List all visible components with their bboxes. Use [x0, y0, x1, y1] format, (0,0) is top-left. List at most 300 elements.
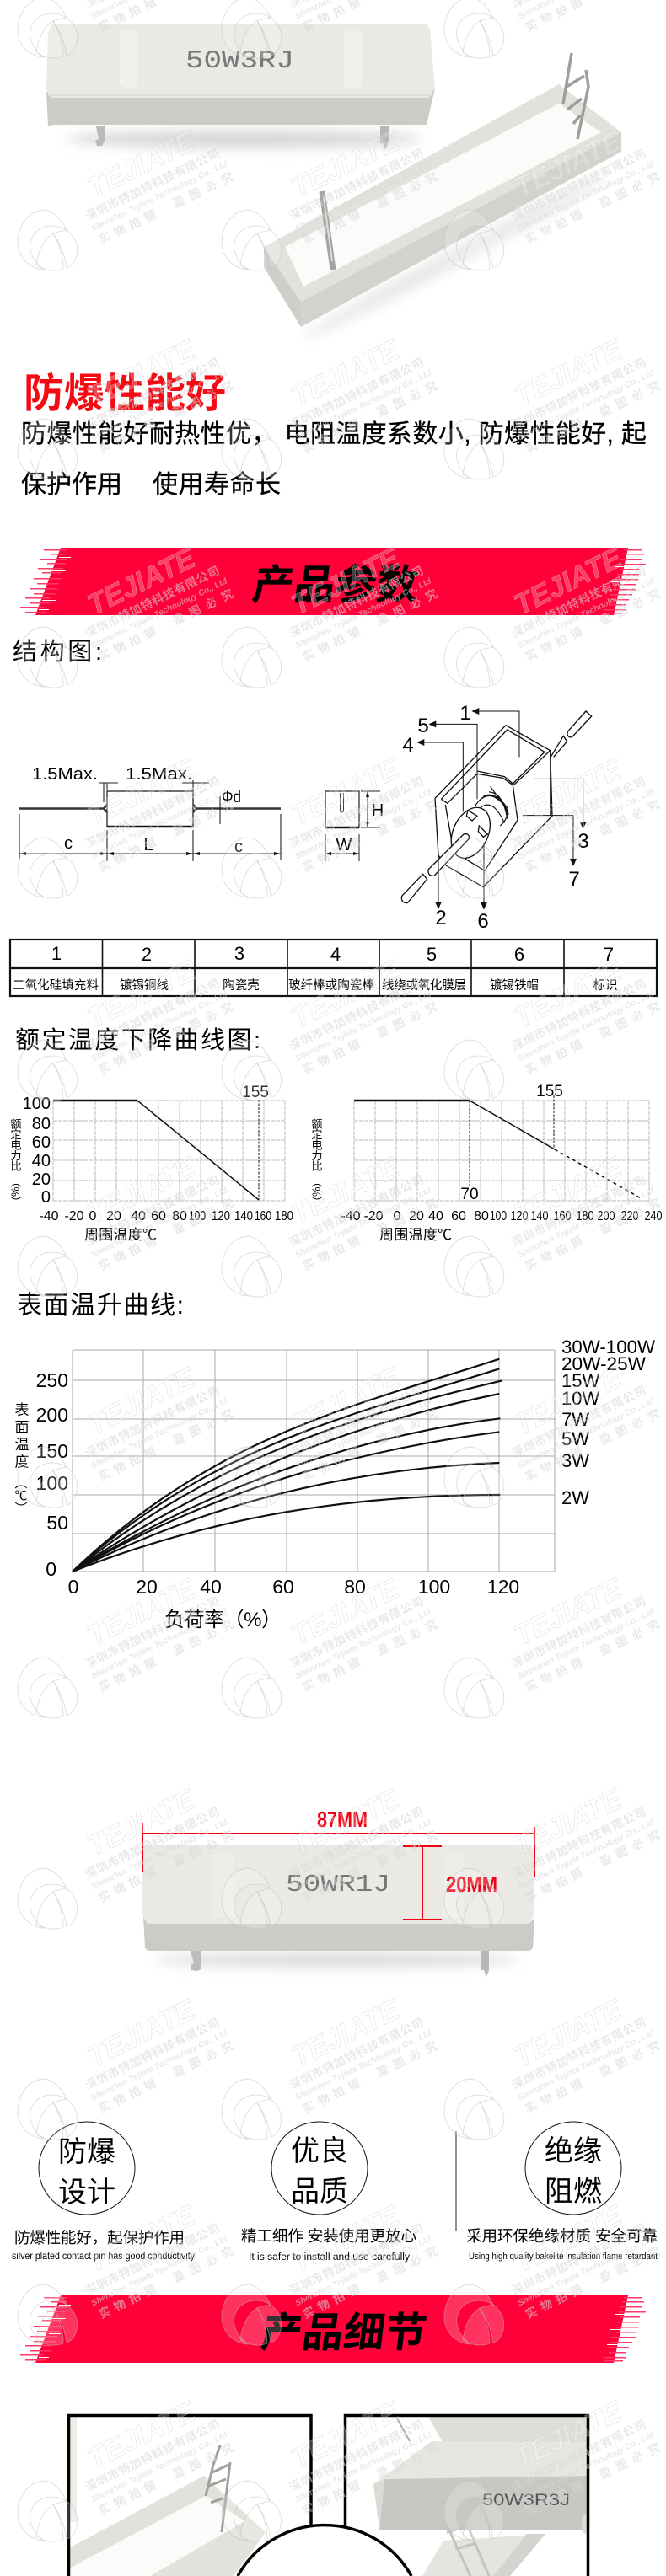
- watermarks: Shenzhen Tejiate Technology Co., Ltd: [294, 368, 433, 442]
- watermarks: 深圳市特加特科技有限公司: [83, 774, 222, 851]
- chart: surface temperature rise: 100: [418, 1576, 450, 1598]
- watermarks: 盈图必究: [170, 999, 235, 1041]
- watermarks: Shenzhen Tejiate Technology Co., Ltd: [90, 787, 229, 861]
- watermarks: Shenzhen Tejiate Technology Co., Ltd: [517, 787, 656, 861]
- watermarks: 实物拍摄: [523, 1234, 585, 1273]
- watermarks: 深圳市特加特科技有限公司: [509, 1594, 648, 1671]
- diagram: end view: H: [372, 801, 384, 820]
- chart: derating curve left: -40: [39, 1209, 59, 1224]
- dimension: 87MM length: 87MM: [317, 1807, 368, 1832]
- chart: derating curve right: （%）: [310, 1176, 322, 1207]
- divider: [206, 2132, 207, 2231]
- watermarks: 深圳市特加特科技有限公司: [509, 147, 648, 223]
- watermarks: 实物拍摄: [96, 2076, 158, 2116]
- watermarks: TEJIATE: [509, 125, 628, 204]
- watermarks: Shenzhen Tejiate Technology Co., Ltd: [90, 1186, 229, 1260]
- feature: insulation and flame retardant: [466, 2122, 658, 2262]
- watermarks: 盈图必究: [597, 1406, 662, 1448]
- watermarks: 实物拍摄: [300, 2478, 363, 2518]
- feature: explosion-proof design: 防爆性能好，起保护作用: [14, 2229, 185, 2247]
- watermarks: TEJIATE: [287, 1783, 406, 1862]
- chart: derating curve left: 140: [234, 1209, 253, 1224]
- watermarks: 盈图必究: [374, 378, 439, 420]
- watermarks: TEJIATE: [509, 2396, 628, 2475]
- watermarks: Shenzhen Tejiate Technology Co., Ltd: [294, 787, 433, 861]
- watermarks: 盈图必究: [597, 169, 662, 211]
- diagram: resistor cutaway with part callouts: 2: [435, 907, 447, 929]
- diagram: dimension drawing: c: [64, 834, 73, 853]
- watermarks: TEJIATE: [287, 2199, 406, 2279]
- watermarks: 实物拍摄: [523, 1866, 585, 1905]
- watermarks: 深圳市特加特科技有限公司: [287, 564, 426, 640]
- table: part legend: 2: [142, 944, 152, 965]
- watermarks: 盈图必究: [170, 2440, 235, 2482]
- chart: derating curve right: 100: [490, 1209, 507, 1224]
- watermarks: 实物拍摄: [96, 1866, 158, 1905]
- watermarks: 深圳市特加特科技有限公司: [509, 564, 648, 640]
- heading: derating curve: 额定温度下降曲线图:: [15, 1026, 260, 1054]
- table: part legend: 镀锡铁帽: [490, 978, 539, 993]
- chart: surface temperature rise: 250: [36, 1369, 68, 1391]
- chart: surface temperature rise: 60: [272, 1576, 294, 1598]
- watermarks: Shenzhen Tejiate Technology Co., Ltd: [90, 1396, 229, 1470]
- watermarks: 深圳市特加特科技有限公司: [509, 2418, 648, 2494]
- watermarks: TEJIATE: [83, 1994, 201, 2073]
- chart: derating curve left: （%）: [8, 1176, 22, 1207]
- chart: derating curve left: 20: [106, 1209, 121, 1224]
- watermarks: Shenzhen Tejiate Technology Co., Ltd: [90, 159, 229, 233]
- watermarks: 盈图必究: [374, 2038, 439, 2080]
- watermarks: TEJIATE: [287, 2396, 406, 2475]
- watermarks: 盈图必究: [374, 586, 439, 628]
- watermarks: 深圳市特加特科技有限公司: [83, 2418, 222, 2494]
- feature: fine quality: 品质: [291, 2176, 348, 2208]
- watermarks: 深圳市特加特科技有限公司: [83, 356, 222, 432]
- watermarks: 实物拍摄: [523, 1655, 585, 1695]
- watermarks: 深圳市特加特科技有限公司: [509, 2016, 648, 2092]
- watermarks: Shenzhen Tejiate Technology Co., Ltd: [294, 159, 433, 233]
- watermarks: 盈图必究: [374, 1196, 439, 1237]
- chart: derating curve left: 0: [41, 1188, 51, 1207]
- chart: derating curve left: -20: [64, 1209, 84, 1224]
- watermarks: Shenzhen Tejiate Technology Co., Ltd: [517, 368, 656, 442]
- watermarks: 实物拍摄: [300, 2282, 363, 2322]
- chart: derating curve left: 160: [255, 1209, 271, 1224]
- watermarks: TEJIATE: [509, 752, 628, 832]
- watermarks: Shenzhen Tejiate Technology Co., Ltd: [517, 2234, 656, 2308]
- watermarks: 盈图必究: [170, 2038, 235, 2080]
- heading: explosion-proof: 防爆性能好: [24, 372, 226, 416]
- chart: derating curve left: 155: [242, 1084, 269, 1101]
- watermarks: TEJIATE: [83, 955, 201, 1034]
- chart: derating curve left: 40: [32, 1152, 51, 1170]
- chart: derating curve right: 160: [553, 1209, 572, 1224]
- watermarks: 实物拍摄: [300, 1037, 363, 1077]
- chart: derating curve left: 100: [189, 1209, 206, 1224]
- watermarks: 盈图必究: [170, 378, 235, 420]
- watermarks: 盈图必究: [374, 2244, 439, 2285]
- table: part legend: 玻纤棒或陶瓷棒: [288, 978, 374, 993]
- chart: surface temperature rise: 200: [36, 1404, 68, 1426]
- table: part legend: 标识: [593, 978, 617, 993]
- chart: derating curve right: 40: [428, 1209, 443, 1224]
- watermarks: Shenzhen Tejiate Technology Co., Ltd: [90, 2430, 229, 2504]
- watermarks: 实物拍摄: [96, 1444, 158, 1484]
- feature: fine quality: 精工细作 安装使用更放心: [241, 2227, 416, 2245]
- watermarks: 深圳市特加特科技有限公司: [287, 1805, 426, 1882]
- watermarks: Shenzhen Tejiate Technology Co., Ltd: [90, 2028, 229, 2102]
- watermarks: 实物拍摄: [523, 1444, 585, 1484]
- watermarks: Shenzhen Tejiate Technology Co., Ltd: [294, 1396, 433, 1470]
- circular callout: [238, 2525, 411, 2576]
- watermarks: 实物拍摄: [523, 2076, 585, 2116]
- watermarks: 深圳市特加特科技有限公司: [287, 1594, 426, 1671]
- photo frame: terminal detail: [67, 2415, 311, 2576]
- watermarks: 盈图必究: [597, 2038, 662, 2080]
- feature: fine quality: [241, 2122, 416, 2263]
- banner: product details: [20, 2295, 646, 2363]
- chart: surface temperature rise: 150: [36, 1440, 68, 1462]
- watermarks: Shenzhen Tejiate Technology Co., Ltd: [517, 1186, 656, 1260]
- watermarks: 盈图必究: [170, 1828, 235, 1869]
- watermarks: 深圳市特加特科技有限公司: [509, 1805, 648, 1882]
- watermarks: Shenzhen Tejiate Technology Co., Ltd: [90, 989, 229, 1063]
- watermarks: TEJIATE: [83, 1783, 201, 1862]
- chart: derating curve left: [8, 1084, 293, 1243]
- photo: two ceramic resistors: 50W3RJ: [185, 47, 294, 76]
- watermarks: TEJIATE: [287, 542, 406, 621]
- chart: surface temperature rise: 表面温度: [12, 1402, 29, 1471]
- chart: derating curve left: 100: [23, 1095, 51, 1113]
- table: part legend: 陶瓷壳: [223, 978, 260, 993]
- watermarks: 深圳市特加特科技有限公司: [287, 977, 426, 1053]
- watermarks: 盈图必究: [597, 1617, 662, 1658]
- watermarks: 实物拍摄: [96, 2282, 158, 2322]
- watermarks: 深圳市特加特科技有限公司: [83, 2016, 222, 2092]
- chart: surface temperature rise: 20W-25W: [561, 1353, 646, 1374]
- watermarks: 深圳市特加特科技有限公司: [83, 1594, 222, 1671]
- diagram: dimension drawing: 1.5Max.: [32, 765, 98, 784]
- watermarks: 实物拍摄: [96, 1655, 158, 1695]
- chart: surface temperature rise: 40: [200, 1576, 222, 1598]
- watermarks: 盈图必究: [374, 169, 439, 211]
- watermarks: Shenzhen Tejiate Technology Co., Ltd: [517, 1607, 656, 1681]
- feature: insulation and flame retardant: 绝缘: [545, 2135, 602, 2167]
- watermarks: 深圳市特加特科技有限公司: [83, 564, 222, 640]
- chart: derating curve left: 60: [32, 1133, 51, 1152]
- watermarks: 深圳市特加特科技有限公司: [287, 2221, 426, 2298]
- watermarks: TEJIATE: [83, 1151, 201, 1230]
- watermarks: 深圳市特加特科技有限公司: [509, 774, 648, 851]
- feature: explosion-proof design: 防爆: [58, 2136, 115, 2168]
- watermarks: 深圳市特加特科技有限公司: [83, 1173, 222, 1250]
- chart: surface temperature rise: 负荷率（%）: [164, 1609, 282, 1631]
- watermarks: TEJIATE: [287, 1572, 406, 1652]
- dimension: 87MM length: [142, 1807, 534, 1877]
- table: part legend: 6: [514, 944, 524, 965]
- watermarks: 盈图必究: [374, 797, 439, 838]
- watermarks: 盈图必究: [597, 797, 662, 838]
- watermarks: Shenzhen Tejiate Technology Co., Ltd: [517, 1818, 656, 1892]
- chart: derating curve right: 额定电力比: [310, 1118, 322, 1172]
- watermarks: TEJIATE: [509, 1362, 628, 1441]
- chart: derating curve left: 80: [32, 1115, 51, 1133]
- watermarks: TEJIATE: [287, 334, 406, 413]
- diagram: resistor cutaway with part callouts: 3: [577, 830, 589, 853]
- watermarks: Shenzhen Tejiate Technology Co., Ltd: [294, 1818, 433, 1892]
- watermarks: 深圳市特加特科技有限公司: [83, 147, 222, 223]
- chart: derating curve left: 180: [275, 1209, 293, 1224]
- watermarks: 盈图必究: [170, 169, 235, 211]
- watermarks: 盈图必究: [597, 2440, 662, 2482]
- table: part legend: 7: [604, 944, 614, 965]
- watermarks: 深圳市特加特科技有限公司: [287, 2016, 426, 2092]
- photo: resistor with dimensions: 50WR1J: [286, 1871, 390, 1899]
- watermarks: Shenzhen Tejiate Technology Co., Ltd: [517, 989, 656, 1063]
- dimension: 20MM width: [403, 1846, 497, 1920]
- watermarks: 深圳市特加特科技有限公司: [509, 1384, 648, 1460]
- text block: feature description: 防爆性能好耐热性优， 电阻温度系数小, 防爆性能好, 起: [21, 420, 647, 448]
- watermarks: Shenzhen Tejiate Technology Co., Ltd: [294, 1186, 433, 1260]
- watermarks: TEJIATE: [509, 1572, 628, 1652]
- watermarks: 盈图必究: [170, 1406, 235, 1448]
- chart: derating curve right: 155: [536, 1083, 563, 1101]
- watermarks: Shenzhen Tejiate Technology Co., Ltd: [90, 1607, 229, 1681]
- watermarks: 实物拍摄: [300, 624, 363, 664]
- diagram: dimension drawing: L: [143, 836, 153, 854]
- watermarks: 盈图必究: [170, 797, 235, 838]
- watermarks: TEJIATE: [509, 1783, 628, 1862]
- chart: derating curve left: 额定电力比: [8, 1118, 22, 1172]
- chart: derating curve right: 80: [474, 1209, 489, 1224]
- watermarks: TEJIATE: [83, 542, 201, 621]
- feature: insulation and flame retardant: 阻燃: [545, 2176, 602, 2208]
- chart: derating curve right: 周围温度℃: [379, 1227, 452, 1243]
- diagram: dimension drawing: 1.5Max.: [126, 765, 192, 784]
- chart: surface temperature rise: 5W: [561, 1428, 589, 1449]
- watermarks: 实物拍摄: [523, 2282, 585, 2322]
- watermarks: 实物拍摄: [96, 2478, 158, 2518]
- watermarks: TEJIATE: [83, 1572, 201, 1652]
- watermarks: 实物拍摄: [96, 207, 158, 247]
- diagram: resistor cutaway with part callouts: 4: [402, 734, 414, 757]
- watermarks: Shenzhen Tejiate Technology Co., Ltd: [294, 2234, 433, 2308]
- chart: surface temperature rise: 20: [136, 1576, 158, 1598]
- watermarks: Shenzhen Tejiate Technology Co., Ltd: [294, 2028, 433, 2102]
- table: part legend: [10, 940, 657, 996]
- feature: insulation and flame retardant: 采用环保绝缘材质 安全可靠: [466, 2227, 658, 2245]
- banner: product parameters: 产品参数: [250, 562, 421, 608]
- chart: derating curve left: 120: [212, 1209, 230, 1224]
- dimension: 20MM width: 20MM: [446, 1872, 497, 1897]
- chart: surface temperature rise: 30W-100W: [561, 1336, 655, 1358]
- watermarks: Shenzhen Tejiate Technology Co., Ltd: [517, 2028, 656, 2102]
- chart: derating curve left: 0: [89, 1209, 97, 1224]
- banner: product parameters: [20, 548, 646, 615]
- chart: surface temperature rise: （℃）: [13, 1476, 27, 1514]
- watermarks: Shenzhen Tejiate Technology Co., Ltd: [517, 2430, 656, 2504]
- watermarks: TEJIATE: [287, 955, 406, 1034]
- chart: derating curve right: 70: [460, 1186, 479, 1203]
- heading: structure diagram: 结构图:: [13, 638, 102, 666]
- text block: feature description: 使用寿命长: [153, 471, 281, 499]
- watermarks: 实物拍摄: [523, 207, 585, 247]
- diagram: dimension drawing: [19, 765, 281, 861]
- watermarks: TEJIATE: [83, 752, 201, 832]
- watermarks: 盈图必究: [597, 1828, 662, 1869]
- watermarks: 盈图必究: [597, 378, 662, 420]
- watermarks: 实物拍摄: [300, 2076, 363, 2116]
- chart: derating curve right: 180: [577, 1209, 594, 1224]
- watermarks: 深圳市特加特科技有限公司: [509, 2221, 648, 2298]
- chart: surface temperature rise: 50: [46, 1512, 68, 1534]
- watermarks: 盈图必究: [374, 1617, 439, 1658]
- watermarks: 深圳市特加特科技有限公司: [83, 1384, 222, 1460]
- chart: surface temperature rise: 3W: [561, 1450, 589, 1471]
- chart: derating curve right: 220: [620, 1209, 639, 1224]
- watermarks: Shenzhen Tejiate Technology Co., Ltd: [517, 576, 656, 651]
- chart: surface temperature rise: 120: [487, 1576, 519, 1598]
- watermarks: TEJIATE: [83, 334, 201, 413]
- table: part legend: 4: [330, 944, 341, 965]
- watermarks: 盈图必究: [170, 586, 235, 628]
- watermarks: TEJIATE: [287, 1994, 406, 2073]
- watermarks: 盈图必究: [597, 586, 662, 628]
- watermarks: Shenzhen Tejiate Technology Co., Ltd: [294, 2430, 433, 2504]
- table: part legend: 1: [51, 943, 62, 964]
- feature: explosion-proof design: 设计: [58, 2177, 115, 2209]
- watermarks: TEJIATE: [83, 2396, 201, 2475]
- table: part legend: 线绕或氧化膜层: [382, 978, 466, 993]
- watermarks: 深圳市特加特科技有限公司: [287, 147, 426, 223]
- chart: derating curve right: -20: [363, 1209, 384, 1224]
- photo: two ceramic resistors: [46, 24, 621, 345]
- banner: product details: 产品细节: [258, 2310, 429, 2356]
- watermarks: 实物拍摄: [96, 835, 158, 875]
- watermarks: 盈图必究: [170, 2244, 235, 2285]
- feature: fine quality: It is safer to install and use carefully: [249, 2252, 410, 2263]
- diagram: resistor cutaway with part callouts: 7: [568, 868, 580, 891]
- watermarks: 盈图必究: [374, 2440, 439, 2482]
- watermarks: TEJIATE: [509, 2199, 628, 2279]
- diagram: resistor cutaway with part callouts: 1: [459, 702, 471, 725]
- watermarks: Shenzhen Tejiate Technology Co., Ltd: [90, 576, 229, 651]
- chart: derating curve right: 0: [394, 1209, 401, 1224]
- chart: derating curve left: 周围温度℃: [84, 1227, 157, 1243]
- watermarks: 深圳市特加特科技有限公司: [287, 774, 426, 851]
- diagram: resistor cutaway with part callouts: 6: [477, 910, 489, 933]
- watermarks: 盈图必究: [597, 999, 662, 1041]
- watermarks: 深圳市特加特科技有限公司: [83, 2221, 222, 2298]
- watermarks: Shenzhen Tejiate Technology Co., Ltd: [294, 576, 433, 651]
- table: part legend: 镀锡铜线: [120, 978, 169, 993]
- chart: surface temperature rise: 10W: [561, 1388, 599, 1409]
- diagram: dimension drawing: c: [234, 838, 243, 856]
- watermarks: 深圳市特加特科技有限公司: [83, 977, 222, 1053]
- chart: surface temperature rise: 7W: [561, 1409, 589, 1430]
- chart: derating curve left: 20: [32, 1170, 51, 1189]
- watermarks: 实物拍摄: [300, 207, 363, 247]
- watermarks: TEJIATE: [83, 2199, 201, 2279]
- chart: surface temperature rise: 15W: [561, 1370, 599, 1391]
- chart: surface temperature rise: 0: [68, 1576, 78, 1598]
- chart: derating curve right: 200: [597, 1209, 615, 1224]
- watermarks: 实物拍摄: [96, 1037, 158, 1077]
- watermarks: 盈图必究: [170, 1196, 235, 1237]
- watermarks: 实物拍摄: [300, 1866, 363, 1905]
- watermarks: 深圳市特加特科技有限公司: [287, 2418, 426, 2494]
- diagram: end view: W: [336, 836, 352, 854]
- watermarks: 实物拍摄: [300, 416, 363, 456]
- heading: surface temperature rise curve: 表面温升曲线:: [17, 1292, 184, 1320]
- feature: fine quality: 优良: [291, 2135, 348, 2167]
- diagram: resistor cutaway with part callouts: 5: [417, 715, 429, 737]
- photo frame: marking detail: 50W3R3J: [482, 2492, 570, 2509]
- chart: derating curve right: [310, 1083, 663, 1243]
- watermarks: TEJIATE: [83, 125, 201, 204]
- watermarks: 实物拍摄: [523, 624, 585, 664]
- feature: explosion-proof design: silver plated contact pin has good conductivity: [12, 2252, 195, 2262]
- watermarks: Shenzhen Tejiate Technology Co., Ltd: [90, 368, 229, 442]
- watermarks: Shenzhen Tejiate Technology Co., Ltd: [517, 159, 656, 233]
- watermarks: TEJIATE: [509, 955, 628, 1034]
- watermarks: 实物拍摄: [96, 1234, 158, 1273]
- watermarks: 盈图必究: [374, 999, 439, 1041]
- watermarks: Shenzhen Tejiate Technology Co., Ltd: [517, 1396, 656, 1470]
- text block: feature description: 保护作用: [21, 471, 122, 499]
- watermarks: 实物拍摄: [523, 835, 585, 875]
- watermarks: 盈图必究: [170, 1617, 235, 1658]
- diagram: end view: [325, 791, 384, 861]
- watermarks: TEJIATE: [287, 125, 406, 204]
- watermarks: TEJIATE: [287, 1362, 406, 1441]
- watermarks: TEJIATE: [287, 1151, 406, 1230]
- watermarks: 实物拍摄: [523, 2478, 585, 2518]
- table: part legend: 二氧化硅填充料: [13, 978, 99, 993]
- chart: surface temperature rise: 0: [46, 1558, 56, 1580]
- table: part legend: 5: [427, 944, 437, 965]
- chart: derating curve right: 60: [451, 1209, 466, 1224]
- watermarks: TEJIATE: [287, 752, 406, 832]
- watermarks: 深圳市特加特科技有限公司: [287, 356, 426, 432]
- watermarks: Shenzhen Tejiate Technology Co., Ltd: [90, 1818, 229, 1892]
- watermarks: 盈图必究: [374, 1828, 439, 1869]
- watermarks: 实物拍摄: [96, 416, 158, 456]
- watermarks: 实物拍摄: [300, 835, 363, 875]
- watermarks: 深圳市特加特科技有限公司: [287, 1384, 426, 1460]
- chart: derating curve left: 60: [151, 1209, 166, 1224]
- chart: surface temperature rise: [12, 1336, 655, 1631]
- divider: [455, 2131, 457, 2231]
- watermarks: TEJIATE: [509, 542, 628, 621]
- watermarks: 实物拍摄: [300, 1655, 363, 1695]
- watermarks: 实物拍摄: [523, 416, 585, 456]
- chart: derating curve right: 140: [531, 1209, 549, 1224]
- watermarks: TEJIATE: [509, 1151, 628, 1230]
- chart: derating curve left: 40: [131, 1209, 146, 1224]
- watermarks: 深圳市特加特科技有限公司: [509, 977, 648, 1053]
- watermarks: 深圳市特加特科技有限公司: [509, 356, 648, 432]
- chart: derating curve left: 80: [172, 1209, 187, 1224]
- watermarks: 盈图必究: [374, 1406, 439, 1448]
- chart: surface temperature rise: 100: [36, 1472, 68, 1494]
- watermarks: 实物拍摄: [523, 1037, 585, 1077]
- watermarks: 盈图必究: [597, 2244, 662, 2285]
- watermarks: 深圳市特加特科技有限公司: [509, 1173, 648, 1250]
- watermarks: Shenzhen Tejiate Technology Co., Ltd: [294, 1607, 433, 1681]
- photo frame: marking detail: [346, 2415, 588, 2576]
- watermarks: Shenzhen Tejiate Technology Co., Ltd: [90, 2234, 229, 2308]
